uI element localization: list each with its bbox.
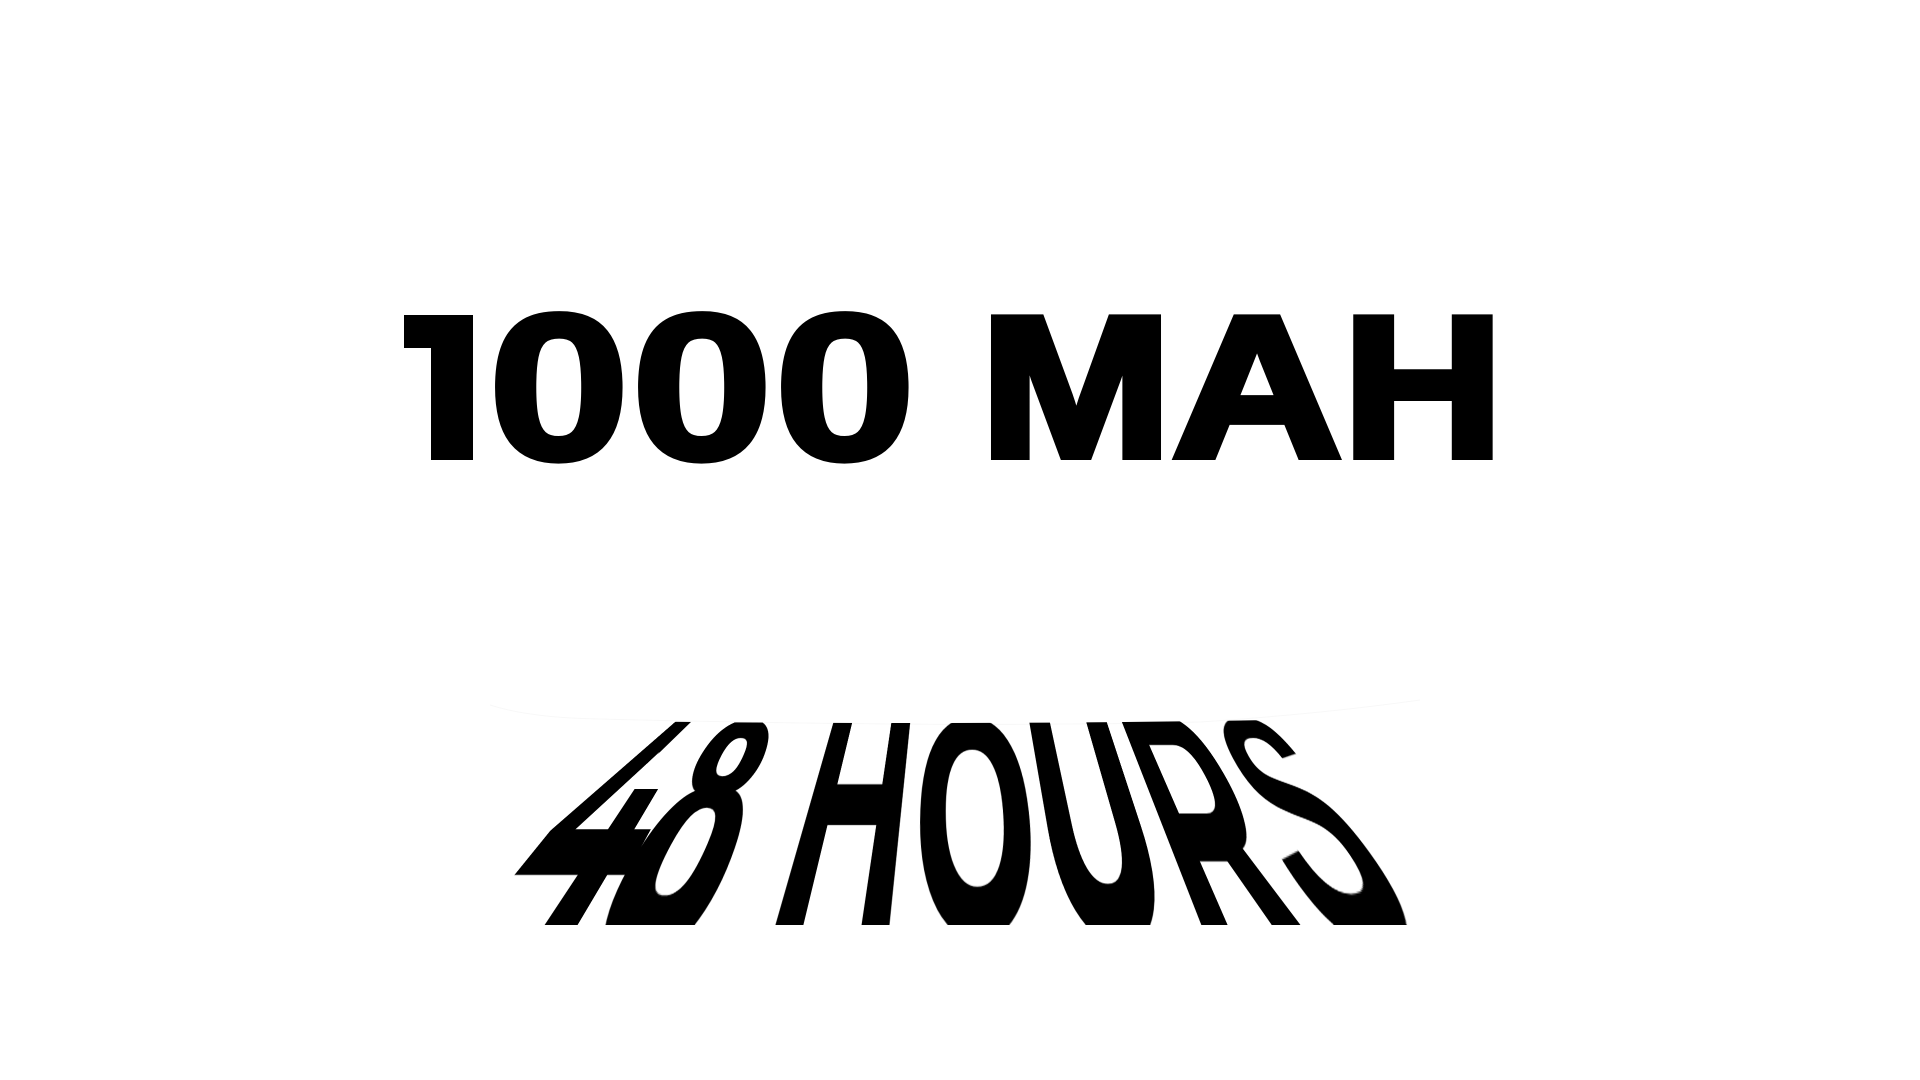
digit 0: 0 (774, 271, 916, 504)
letter M: M (980, 275, 1172, 499)
digit 0: 0 (488, 271, 630, 504)
digit 1: 1 (380, 273, 516, 501)
warped text: 48 HOURS (514, 720, 1408, 925)
warped letter U: U (1014, 663, 1227, 1056)
heading: 1000 MAH (404, 311, 1493, 464)
warped letter O: O (906, 677, 1060, 1028)
letter A: A (1173, 276, 1341, 499)
digit 1 (404, 315, 473, 460)
letter H: H (1343, 275, 1503, 499)
digit 0: 0 (631, 271, 773, 504)
